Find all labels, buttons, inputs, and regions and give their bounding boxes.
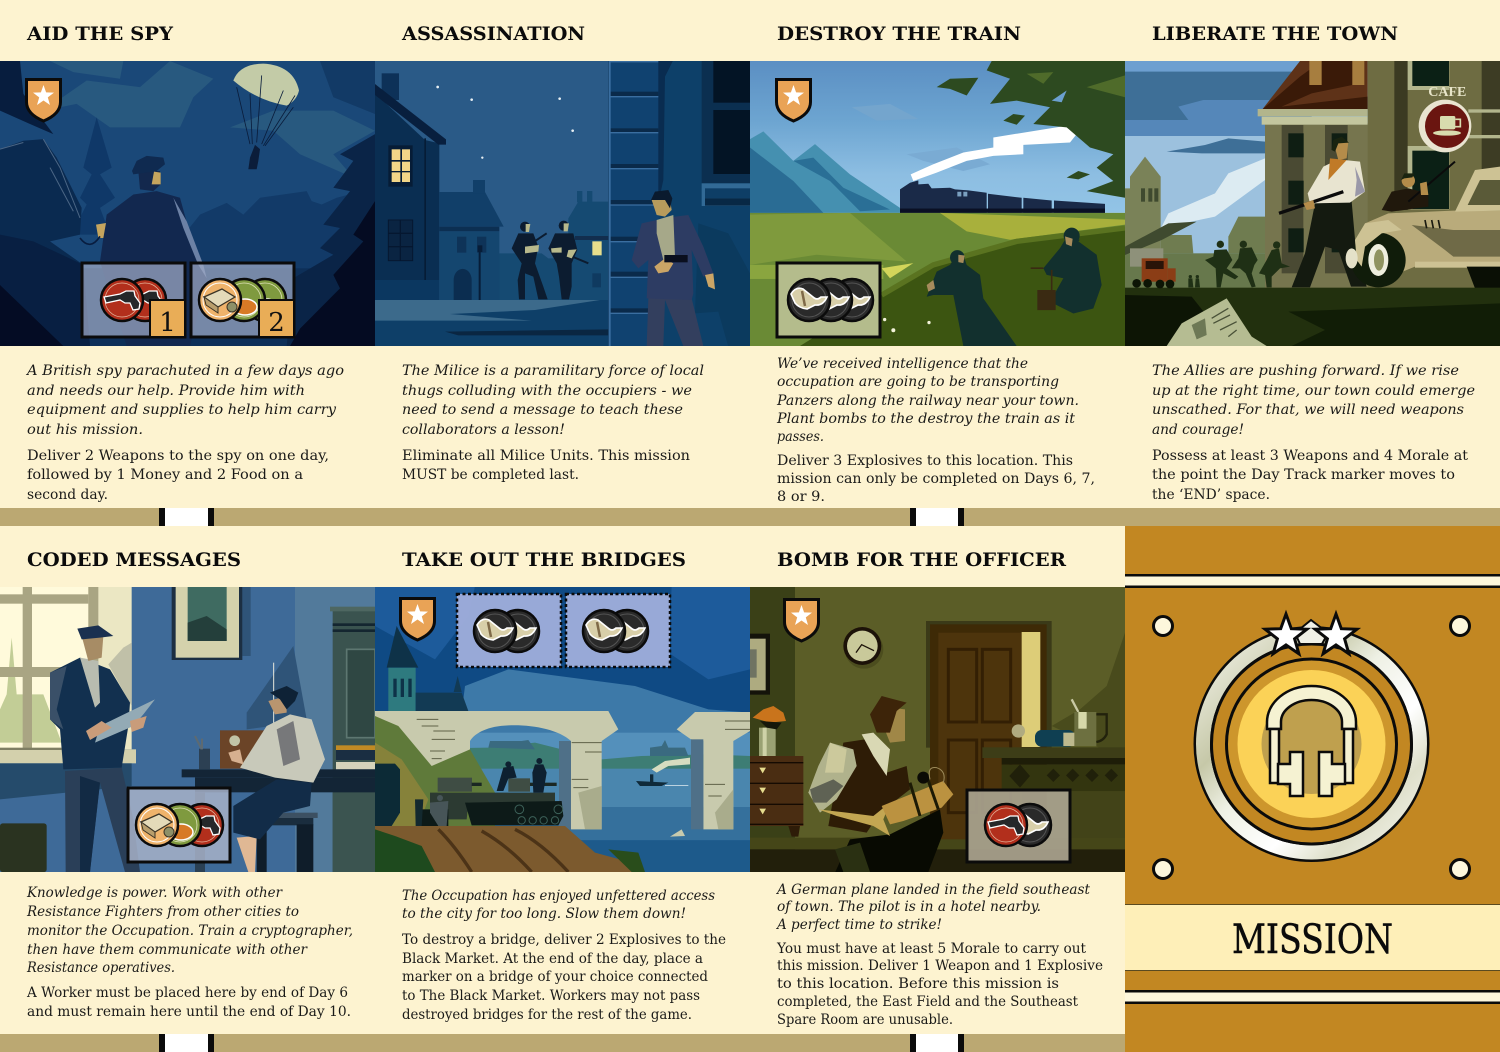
story text: and needs our help. Provide him with — [27, 383, 305, 399]
cafe sign — [1419, 85, 1471, 152]
objective text: completed, the East Field and the Southeast — [777, 994, 1078, 1010]
objective text — [402, 448, 690, 483]
token box: money and food day 2: 2 — [268, 308, 285, 338]
objective text: and must remain here until the end of Day 10. — [27, 1004, 351, 1020]
token box: weapons day 1 — [82, 263, 185, 338]
objective text: this mission. Deliver 1 Weapon and 1 Explosive — [777, 958, 1103, 974]
story text: Resistance Fighters from other cities to — [26, 904, 299, 920]
story text: need to send a message to teach these — [402, 402, 683, 418]
story text: Plant bombs to the destroy the train as it — [776, 411, 1075, 427]
panel: aid the spy — [0, 23, 375, 503]
title: LIBERATE THE TOWN — [1152, 23, 1398, 45]
objective text: marker on a bridge of your choice connected — [402, 969, 708, 985]
objective text: Black Market. At the end of the day, place a — [402, 951, 703, 967]
objective text: mission can only be completed on Days 6, 7, — [777, 471, 1095, 487]
objective text — [27, 448, 329, 503]
panel: coded messages — [0, 549, 375, 1020]
story text: The Milice is a paramilitary force of local — [402, 363, 704, 379]
story text: passes. — [777, 429, 824, 445]
illustration: fighters at the cafe — [1125, 61, 1500, 346]
objective text — [26, 985, 351, 1020]
panel: destroy the train — [750, 23, 1125, 505]
illustration: night street — [375, 61, 750, 346]
illustration: spy at night with parachutist — [0, 61, 375, 346]
objective text — [776, 941, 1103, 1028]
panel: assassination — [375, 23, 750, 483]
objective text: second day. — [27, 487, 108, 503]
story text: A German plane landed in the field southeast — [775, 882, 1090, 898]
story text: collaborators a lesson! — [402, 422, 565, 438]
token box: weapon and explosive — [967, 790, 1070, 862]
token box: explosives right bridge — [566, 594, 670, 667]
token box: resources — [128, 788, 230, 862]
story text — [1152, 363, 1475, 438]
story text: Resistance operatives. — [26, 960, 175, 976]
illustration: train and saboteurs — [750, 61, 1125, 346]
illustration: man with bomb in hotel room — [750, 587, 1125, 872]
objective text — [402, 932, 726, 1023]
story text: monitor the Occupation. Train a cryptographer, — [27, 923, 353, 939]
story text — [402, 888, 715, 922]
objective text: MUST be completed last. — [402, 467, 579, 483]
story text: The Occupation has enjoyed unfettered access — [402, 888, 715, 904]
cafe sign: CAFE — [1428, 85, 1466, 100]
objective text: destroyed bridges for the rest of the game. — [402, 1007, 692, 1023]
title: AID THE SPY — [26, 23, 173, 45]
illustration: radio room — [0, 587, 375, 872]
objective text — [1152, 448, 1468, 503]
objective text: Possess at least 3 Weapons and 4 Morale at — [1152, 448, 1468, 464]
story text: We’ve received intelligence that the — [777, 356, 1028, 372]
objective text: Deliver 2 Weapons to the spy on one day, — [27, 448, 329, 464]
icon: shield — [776, 80, 810, 121]
title: DESTROY THE TRAIN — [777, 23, 1021, 45]
token box: explosives — [777, 263, 880, 337]
story text: Panzers along the railway near your town. — [776, 393, 1079, 409]
icon: shield — [26, 80, 60, 121]
story text — [402, 363, 704, 438]
story text: Knowledge is power. Work with other — [26, 885, 283, 901]
story text: then have them communicate with other — [27, 942, 308, 958]
story text: to the city for too long. Slow them down! — [402, 906, 686, 922]
illustration: bridge and tank — [375, 587, 750, 872]
story text — [26, 885, 353, 976]
story text: A British spy parachuted in a few days ago — [25, 363, 344, 379]
token box: weapons day 1: 1 — [159, 308, 176, 338]
story text — [25, 363, 344, 438]
story text: and courage! — [1152, 422, 1244, 438]
panel: bomb for the officer — [750, 549, 1125, 1028]
objective text: Spare Room are unusable. — [777, 1012, 953, 1028]
objective text: To destroy a bridge, deliver 2 Explosives to the — [402, 932, 726, 948]
objective text: to The Black Market. Workers may not pass — [402, 988, 700, 1004]
panel: mission card back — [1125, 526, 1500, 1052]
token box: explosives left bridge — [457, 594, 561, 667]
objective text: Deliver 3 Explosives to this location. This — [777, 453, 1073, 469]
objective text: followed by 1 Money and 2 Food on a — [27, 467, 303, 483]
story text: A perfect time to strike! — [775, 917, 942, 933]
token box: money and food day 2 — [191, 263, 294, 338]
objective text: A Worker must be placed here by end of Day 6 — [26, 985, 348, 1001]
title: TAKE OUT THE BRIDGES — [402, 549, 686, 571]
objective text — [777, 453, 1095, 505]
mission label band: MISSION — [1232, 917, 1393, 963]
story text: equipment and supplies to help him carry — [27, 402, 337, 418]
mission label band — [1125, 904, 1500, 971]
title: BOMB FOR THE OFFICER — [777, 549, 1066, 571]
emblem: headphones in ring with stars — [1194, 614, 1430, 862]
title: CODED MESSAGES — [27, 549, 241, 571]
story text: out his mission. — [27, 422, 143, 438]
story text: occupation are going to be transporting — [777, 374, 1059, 390]
story text: up at the right time, our town could emerge — [1152, 383, 1475, 399]
story text: thugs colluding with the occupiers - we — [402, 383, 692, 399]
objective text: the point the Day Track marker moves to — [1152, 467, 1455, 483]
icon: shield — [784, 600, 818, 641]
story text: unscathed. For that, we will need weapons — [1152, 402, 1464, 418]
story text — [775, 882, 1090, 933]
corner rivets — [1154, 616, 1470, 878]
story text: of town. The pilot is in a hotel nearby. — [777, 899, 1041, 915]
story text — [776, 356, 1079, 445]
bottom bars — [0, 508, 1500, 1052]
panel: liberate the town — [1125, 23, 1500, 503]
panel: take out the bridges — [375, 549, 750, 1023]
title: ASSASSINATION — [401, 23, 585, 45]
objective text: Eliminate all Milice Units. This mission — [402, 448, 690, 464]
story text: The Allies are pushing forward. If we rise — [1152, 363, 1459, 379]
objective text: the ‘END’ space. — [1152, 487, 1270, 503]
objective text: 8 or 9. — [777, 489, 825, 505]
objective text: to this location. Before this mission is — [777, 976, 1059, 992]
objective text: You must have at least 5 Morale to carry out — [776, 941, 1086, 957]
icon: shield — [400, 598, 434, 640]
